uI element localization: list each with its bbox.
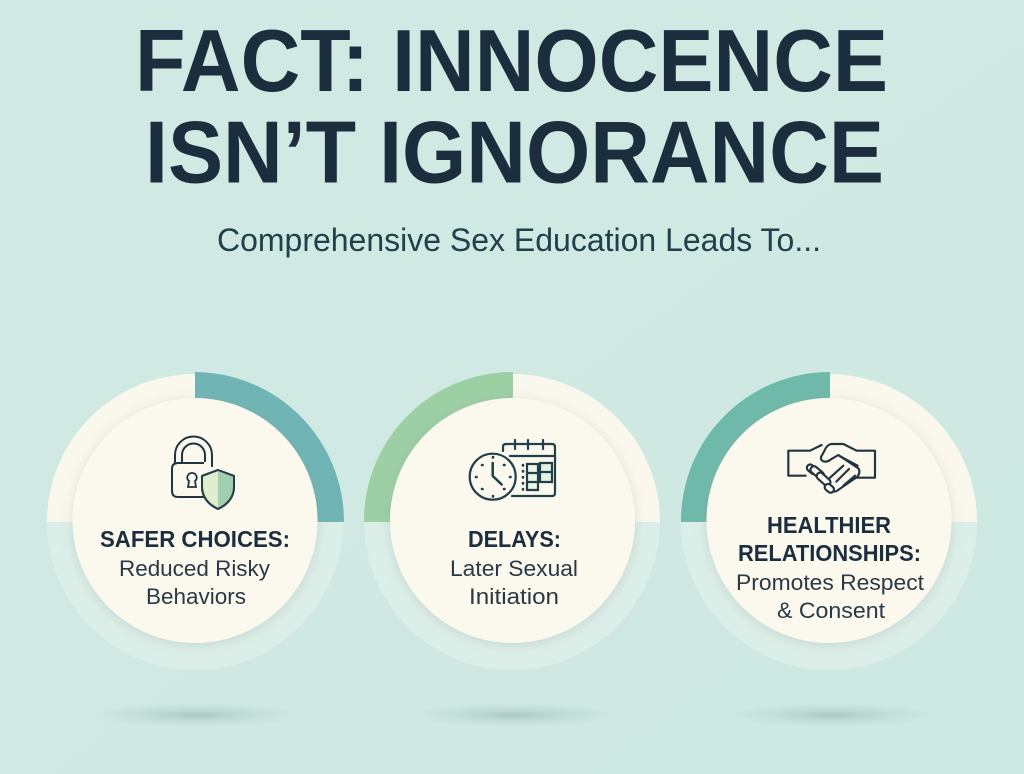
inner disc bbox=[72, 398, 318, 643]
body text: & Consent bbox=[777, 598, 886, 623]
title: FACT: INNOCENCE bbox=[135, 11, 888, 110]
heading bbox=[738, 512, 921, 566]
teal ring segment bbox=[681, 372, 830, 522]
heading: DELAYS: bbox=[468, 526, 561, 552]
ground shadow bbox=[97, 703, 297, 727]
icon: lock and shield bbox=[172, 436, 234, 509]
green ring segment bbox=[364, 372, 513, 522]
heading: HEALTHIER bbox=[767, 512, 891, 538]
cream ring segment bbox=[47, 374, 195, 522]
cream ring segment bbox=[829, 374, 977, 522]
body text: Reduced Risky bbox=[119, 556, 271, 581]
inner disc bbox=[706, 398, 952, 643]
body text: Behaviors bbox=[146, 584, 246, 609]
title bbox=[135, 11, 888, 202]
teal ring segment bbox=[195, 372, 344, 522]
lower ring bbox=[681, 522, 977, 670]
heading: RELATIONSHIPS: bbox=[738, 540, 921, 566]
title: ISN’T IGNORANCE bbox=[145, 102, 884, 202]
ground shadow bbox=[732, 703, 932, 727]
subtitle: Comprehensive Sex Education Leads To... bbox=[217, 222, 821, 258]
panel: healthier relationships bbox=[681, 372, 977, 727]
inner disc bbox=[390, 398, 635, 643]
cream ring segment bbox=[512, 374, 660, 522]
lower ring bbox=[364, 522, 660, 670]
body text: Initiation bbox=[469, 584, 559, 609]
body text bbox=[119, 556, 271, 609]
icon: clock and calendar bbox=[470, 440, 555, 500]
body text bbox=[450, 556, 578, 609]
body text: Later Sexual bbox=[450, 556, 578, 581]
body text bbox=[736, 570, 925, 623]
lower ring bbox=[47, 522, 343, 670]
body text: Promotes Respect bbox=[736, 570, 925, 595]
panel: safer choices bbox=[47, 372, 344, 727]
panel: delays bbox=[364, 372, 660, 727]
ground shadow bbox=[414, 703, 614, 727]
heading: SAFER CHOICES: bbox=[100, 526, 290, 552]
icon: handshake bbox=[788, 444, 875, 494]
